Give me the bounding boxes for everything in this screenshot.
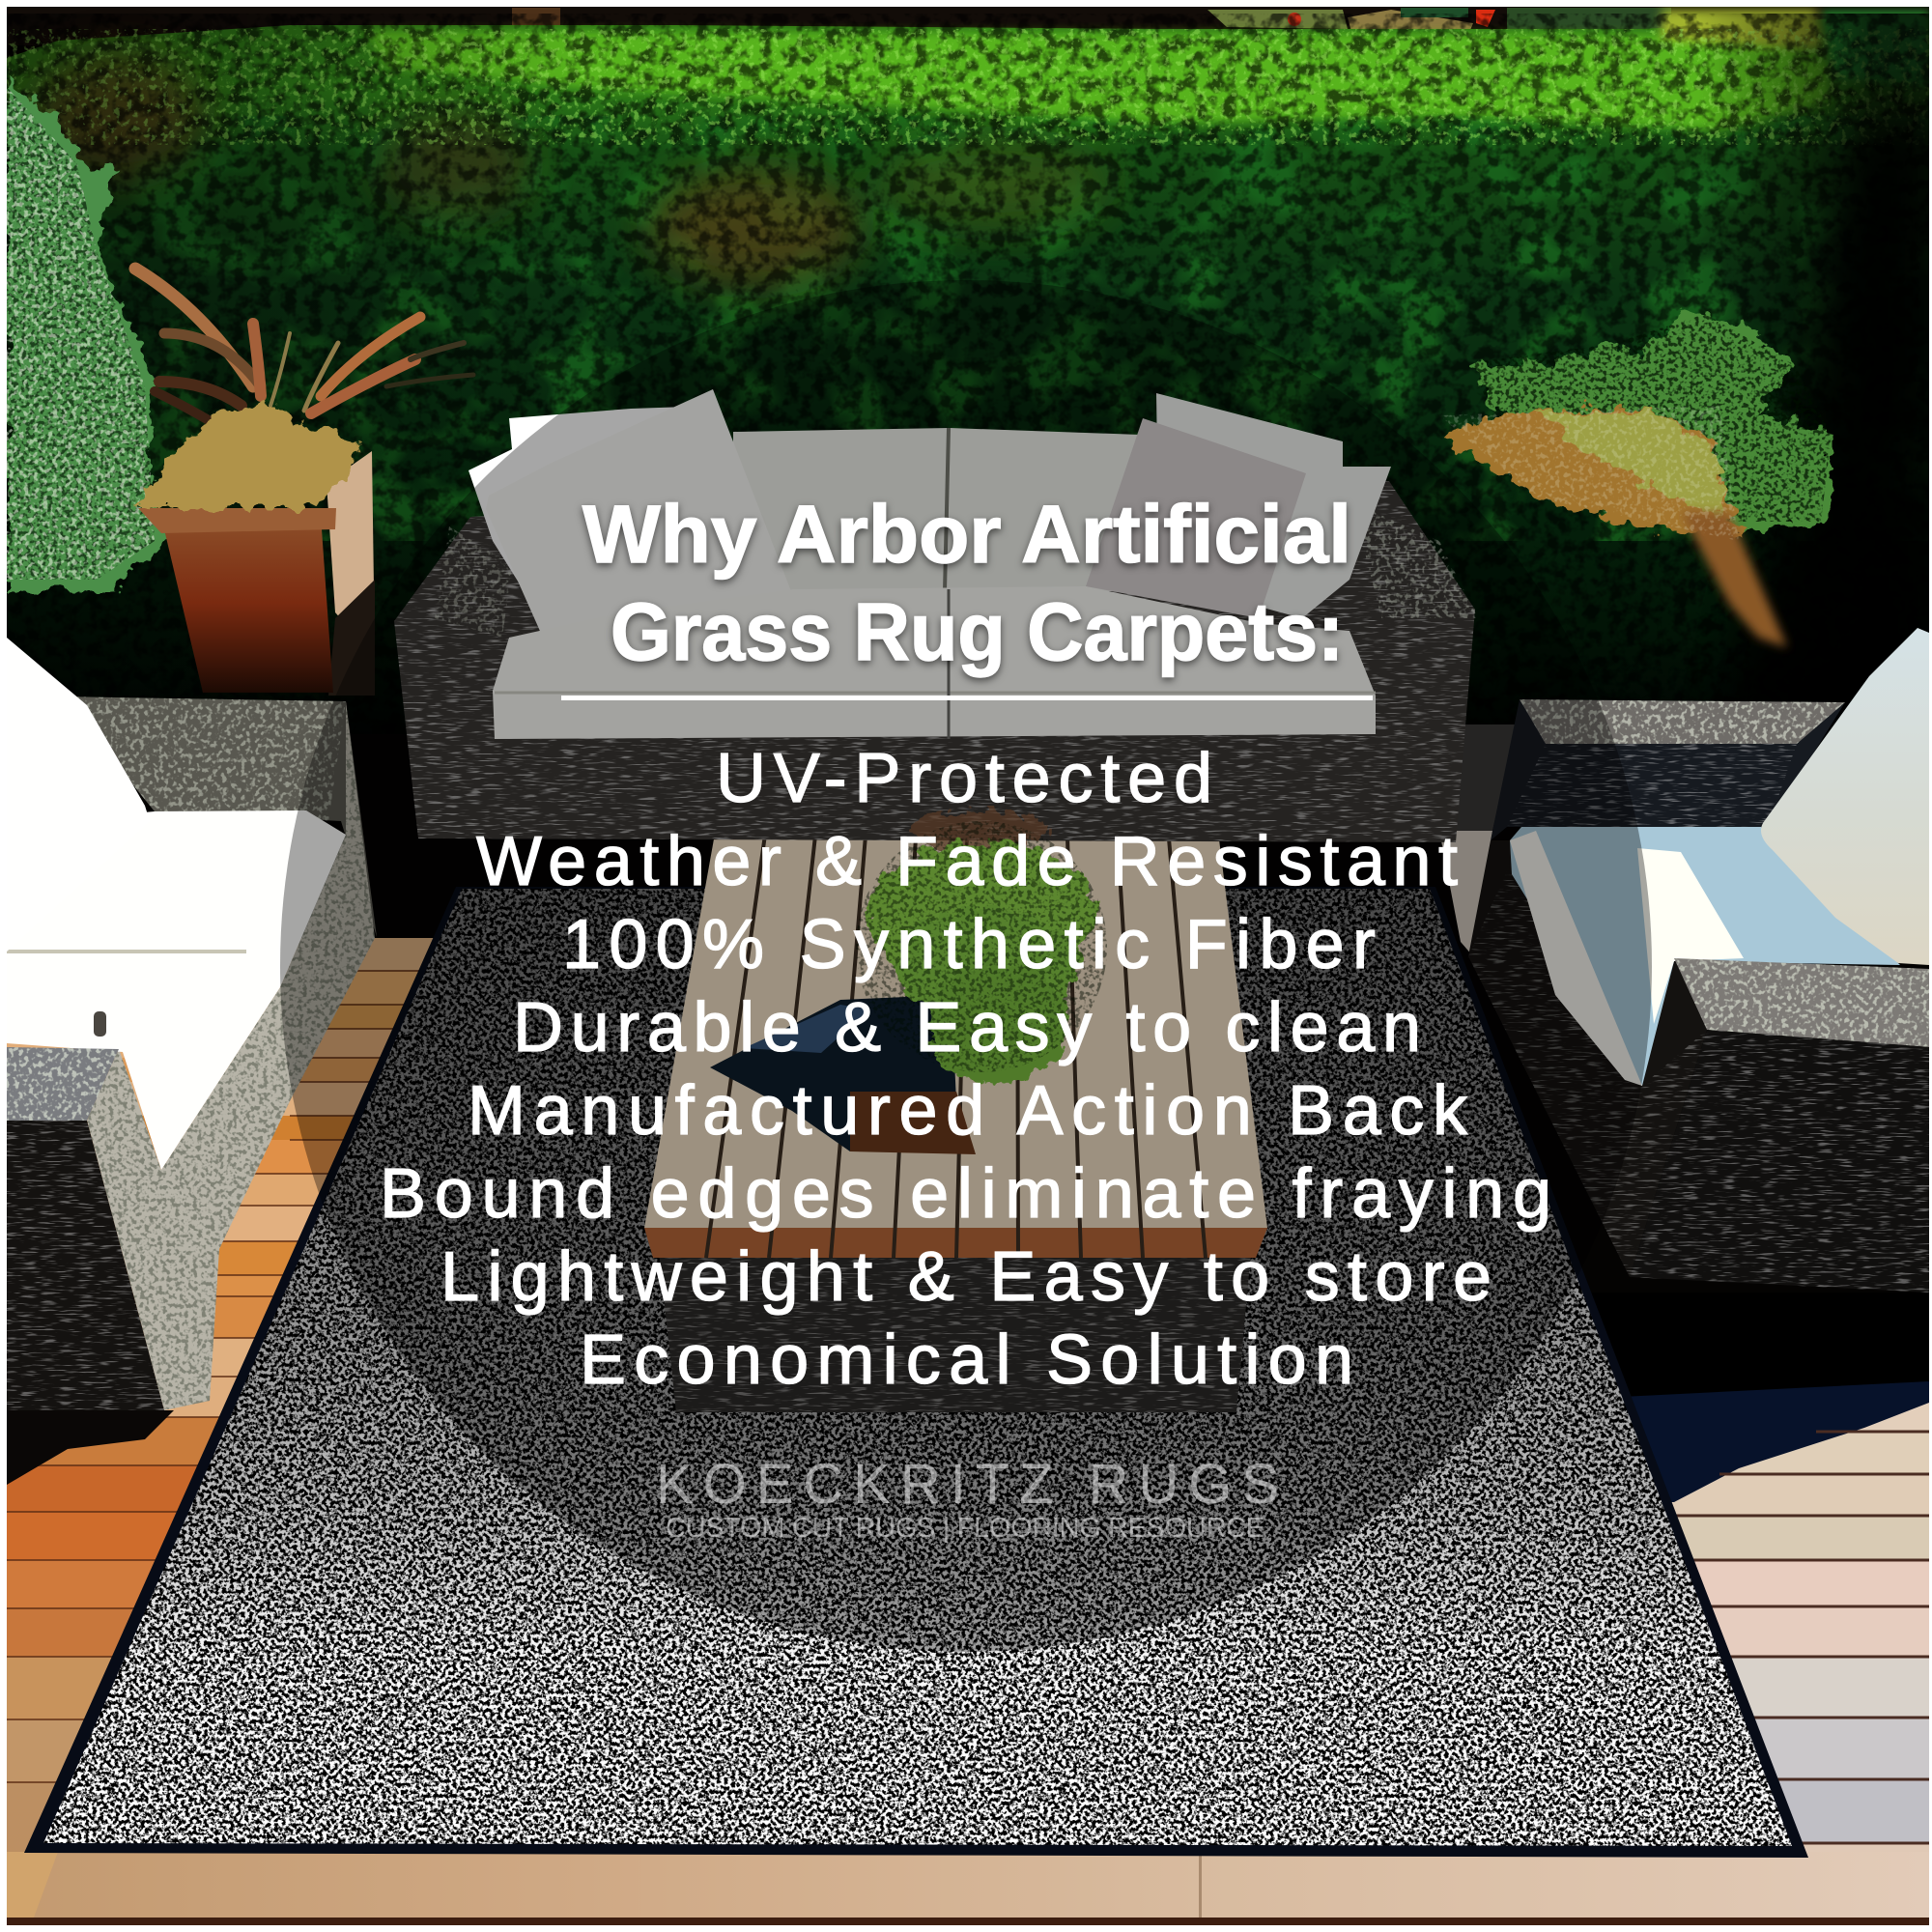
rug binding	[24, 887, 1808, 1858]
left pillow	[486, 389, 794, 638]
table top	[644, 834, 1267, 1228]
planter grass mound	[140, 405, 359, 507]
table base	[659, 1252, 1251, 1412]
hedge	[7, 10, 1929, 734]
rug	[24, 887, 1808, 1858]
sofa	[394, 389, 1478, 842]
deck: bottom plank	[7, 1852, 1929, 1925]
sofa back cushions	[733, 428, 1140, 591]
left bush	[7, 77, 166, 591]
watermark: KOECKRITZ RUGS	[656, 1453, 1279, 1516]
feature: Economical Solution: Economical Solution	[580, 1321, 1353, 1399]
table plant	[856, 810, 1107, 1084]
watermark: CUSTOM CUT RUGS | FLOORING RESOURCE	[666, 1513, 1264, 1544]
white back pillow	[469, 406, 715, 618]
hedge right shadow	[1750, 104, 1929, 680]
left chair shadow	[7, 1410, 174, 1485]
left chair front arm	[7, 1047, 119, 1121]
planter pedestal	[138, 451, 375, 696]
left chair pillow	[7, 638, 150, 952]
feature: Lightweight & Easy to store: Lightweight & Easy to store	[440, 1238, 1492, 1316]
deck: right planks	[1449, 1293, 1929, 1918]
right chair side	[1468, 840, 1707, 1277]
table front	[644, 1228, 1267, 1258]
right chair pillow	[1761, 628, 1929, 965]
ornamental grass plumes	[135, 269, 473, 435]
watermark	[656, 1453, 1279, 1544]
shrub straw	[1439, 406, 1744, 541]
title	[582, 489, 1351, 677]
shrub foliage	[1473, 314, 1832, 531]
left chair back arm	[61, 696, 377, 937]
table reflection	[710, 995, 958, 1151]
right shrub	[1439, 314, 1832, 647]
hedge texture	[7, 14, 1929, 734]
hedge bright top band	[367, 10, 1929, 130]
right chair	[1468, 628, 1929, 1293]
rug pile	[43, 889, 1792, 1846]
title: Why Arbor Artificial	[582, 489, 1351, 580]
left chair side	[87, 701, 375, 1410]
table	[644, 834, 1267, 1412]
sofa shadow on the deck	[1449, 1293, 1929, 1502]
title underline	[561, 696, 1373, 700]
left chair seat	[7, 810, 346, 1170]
backdrop: dark garden	[7, 45, 1929, 1293]
left chair	[7, 638, 377, 1485]
top edge flowers and foliage	[7, 7, 1929, 45]
right deck fragment behind rug	[1439, 724, 1517, 956]
right rear pillow	[1156, 393, 1391, 618]
feature: UV-Protected: UV-Protected	[716, 740, 1212, 817]
title: Grass Rug Carpets:	[611, 586, 1344, 677]
right chair back arm	[1491, 699, 1845, 840]
right pillow	[1086, 418, 1306, 618]
feature: Weather & Fade Resistant: Weather & Fade Resistant	[476, 823, 1458, 900]
sofa seat cushions	[493, 586, 1376, 739]
feature: Bound edges eliminate fraying: Bound edges eliminate fraying	[380, 1155, 1551, 1233]
feature: Manufactured Action Back: Manufactured Action Back	[468, 1072, 1468, 1150]
dark circular overlay	[280, 280, 1652, 1652]
feature list	[380, 740, 1551, 1399]
feature: 100% Synthetic Fiber: 100% Synthetic Fiber	[562, 906, 1376, 983]
feature: Durable & Easy to clean: Durable & Easy to clean	[513, 989, 1421, 1066]
deck: left planks	[7, 938, 509, 1852]
hedge mid-green patches	[7, 116, 1929, 541]
hedge brown patches	[29, 53, 1111, 285]
right chair seat	[1510, 827, 1900, 1086]
right chair front arm	[1674, 958, 1929, 1047]
sofa frame	[394, 481, 1475, 842]
